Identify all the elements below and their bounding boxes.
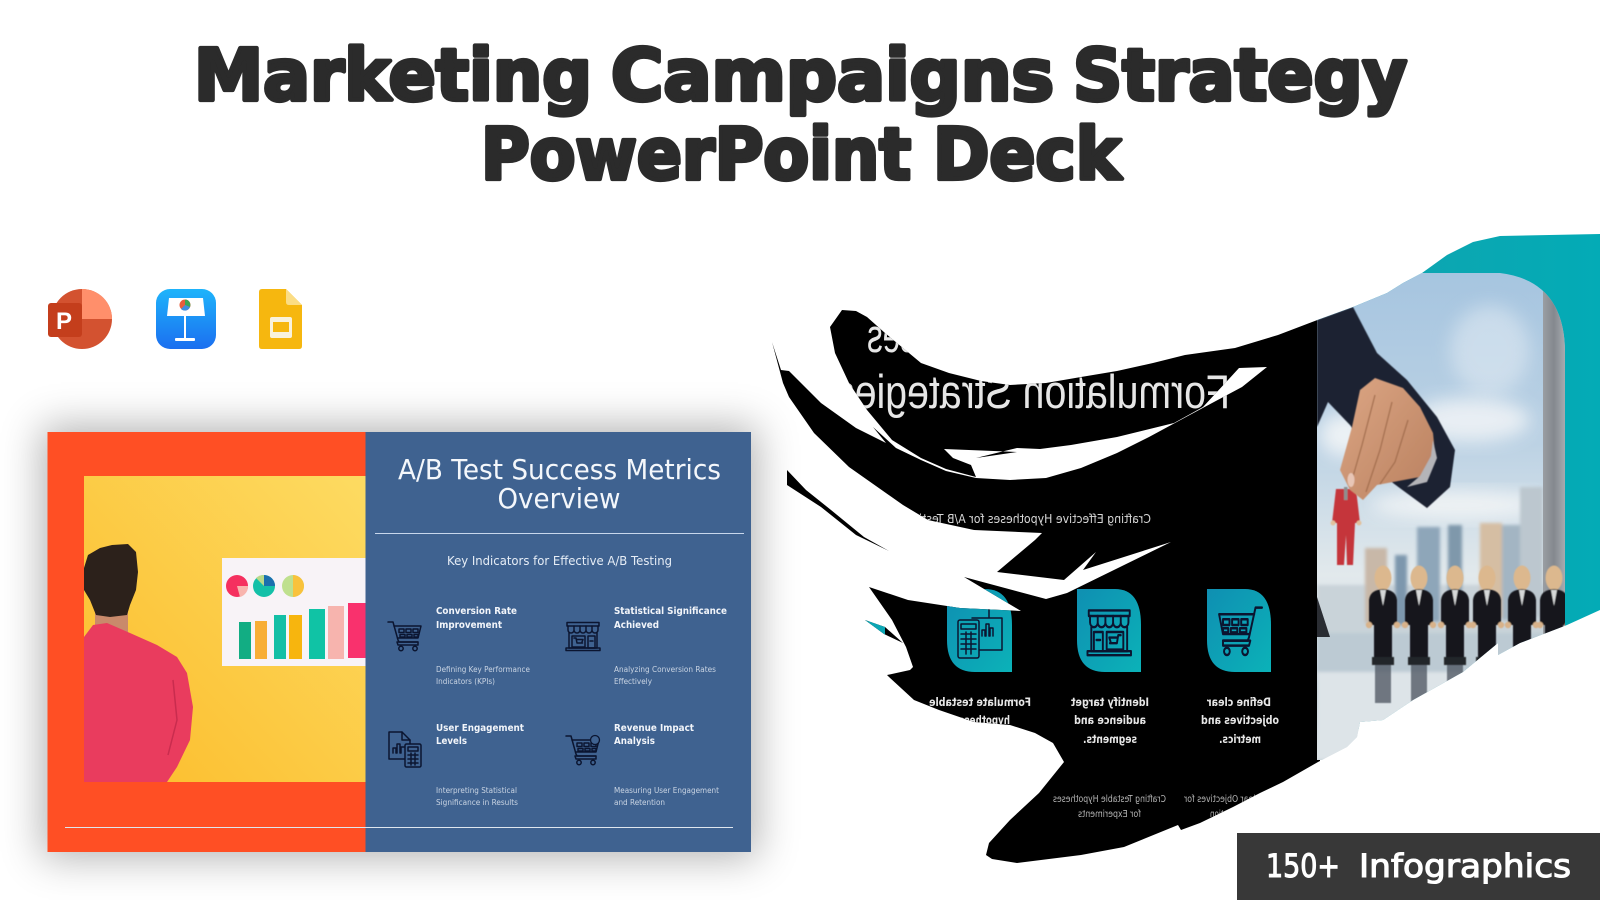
- mirrored step descriptions: A/B Optimization: [1210, 809, 1270, 820]
- blurred city skyline: [1317, 487, 1565, 763]
- title: Strategy: [1073, 34, 1407, 117]
- metric: conversion rate: Indicators (KPIs): [436, 677, 495, 686]
- mirrored step descriptions: Crafting Testable Hypotheses: [1053, 794, 1166, 805]
- slide heading: Overview: [498, 483, 620, 515]
- slide heading: A/B Test Success Metrics: [398, 454, 721, 486]
- mirrored heading fragments: Formulation Strategies: [835, 365, 1230, 418]
- metric: revenue impact: Revenue Impact: [614, 723, 695, 734]
- metric: revenue impact: and Retention: [614, 798, 665, 807]
- mirrored step labels: segments.: [1083, 732, 1137, 746]
- panel: torn mirrored slide: [760, 220, 1600, 900]
- metric: statistical significance: Statistical Significance: [614, 606, 727, 617]
- hand: [1340, 378, 1437, 500]
- slide blue content panel: [366, 432, 751, 852]
- row of six figures: [1366, 566, 1571, 703]
- slide heading: [398, 454, 721, 515]
- mirrored heading fragments: A/B Testing Hypotheses: [867, 309, 1200, 362]
- icon: Google Slides: [259, 289, 302, 349]
- man figure: [84, 544, 193, 782]
- metric: user engagement: [389, 723, 525, 807]
- metric: conversion rate: [388, 606, 530, 686]
- mirrored step labels: Identify target: [1071, 695, 1149, 709]
- slide drop shadow: [48, 432, 751, 852]
- badge: 150+ infographics: [1237, 833, 1600, 900]
- title: Marketing: [194, 34, 592, 117]
- metric: user engagement: User Engagement: [436, 723, 525, 734]
- mirrored heading fragments: [849, 326, 1227, 418]
- grey window strip: [1543, 291, 1565, 634]
- panel: slide preview: [48, 432, 751, 852]
- metric: statistical significance: Analyzing Conversion Rates: [614, 665, 716, 674]
- metric: statistical significance: [566, 606, 727, 686]
- mirrored step descriptions: for Experiments: [1078, 809, 1141, 820]
- metric: user engagement: Interpreting Statistical: [436, 786, 517, 795]
- mirrored step descriptions: [1053, 794, 1255, 819]
- metric: conversion rate: Conversion Rate: [436, 606, 517, 617]
- metric: statistical significance: Achieved: [614, 620, 659, 631]
- mirrored step labels: hypotheses.: [950, 713, 1010, 727]
- black mirrored background: [772, 310, 1320, 863]
- mirrored step labels: audience and: [1074, 713, 1146, 727]
- metric: revenue impact: [566, 723, 719, 807]
- metric: revenue impact: Analysis: [614, 736, 655, 747]
- badge: 150+ infographics: 150+: [1266, 847, 1340, 885]
- mirrored step labels: Formulate testable: [929, 695, 1031, 709]
- title: Deck: [933, 113, 1123, 196]
- dark suit sleeve: [1317, 307, 1455, 508]
- metric: statistical significance: Effectively: [614, 677, 653, 686]
- icon: Keynote: [156, 289, 216, 349]
- metric: conversion rate: Defining Key Performance: [436, 665, 530, 674]
- title: Campaigns: [611, 34, 1054, 117]
- slide subheading: Key Indicators for Effective A/B Testing: [447, 553, 672, 568]
- photo: hand picking leader figure: [1317, 273, 1571, 763]
- tile: calculator icon: [947, 589, 1012, 672]
- mirrored step descriptions: Defining Clear Objectives for: [1184, 794, 1296, 805]
- icon: PowerPoint: P: [56, 308, 72, 335]
- metric: user engagement: Levels: [436, 736, 467, 747]
- chart card on wall: [222, 558, 366, 666]
- title: [194, 34, 1407, 196]
- mirrored step labels: [929, 695, 1279, 746]
- badge: 150+ infographics: Infographics: [1359, 847, 1571, 885]
- slide orange background: [48, 432, 366, 852]
- metric: revenue impact: Measuring User Engagement: [614, 786, 719, 795]
- mirrored subheading: Crafting Effective Hypotheses for A/B Testing: [905, 512, 1151, 526]
- icon: PowerPoint: [48, 289, 112, 349]
- metric: user engagement: Significance in Results: [436, 798, 518, 807]
- slide photo: man looking at charts on yellow wall: [84, 476, 366, 782]
- mirrored step labels: metrics.: [1219, 732, 1261, 746]
- title: PowerPoint: [481, 113, 911, 196]
- app icons row: [48, 289, 302, 349]
- mirrored step labels: Define clear: [1207, 695, 1271, 709]
- tile: store icon: [1077, 589, 1141, 672]
- mirrored step labels: objectives and: [1201, 713, 1279, 727]
- teal edge background: [1317, 230, 1600, 730]
- metric: conversion rate: Improvement: [436, 620, 503, 631]
- teal sliver of hidden icon tile: [865, 620, 885, 634]
- tile: cart icon: [1207, 589, 1271, 672]
- red leader figure: [1330, 487, 1362, 565]
- shadow figure at photo edge: [1317, 597, 1330, 637]
